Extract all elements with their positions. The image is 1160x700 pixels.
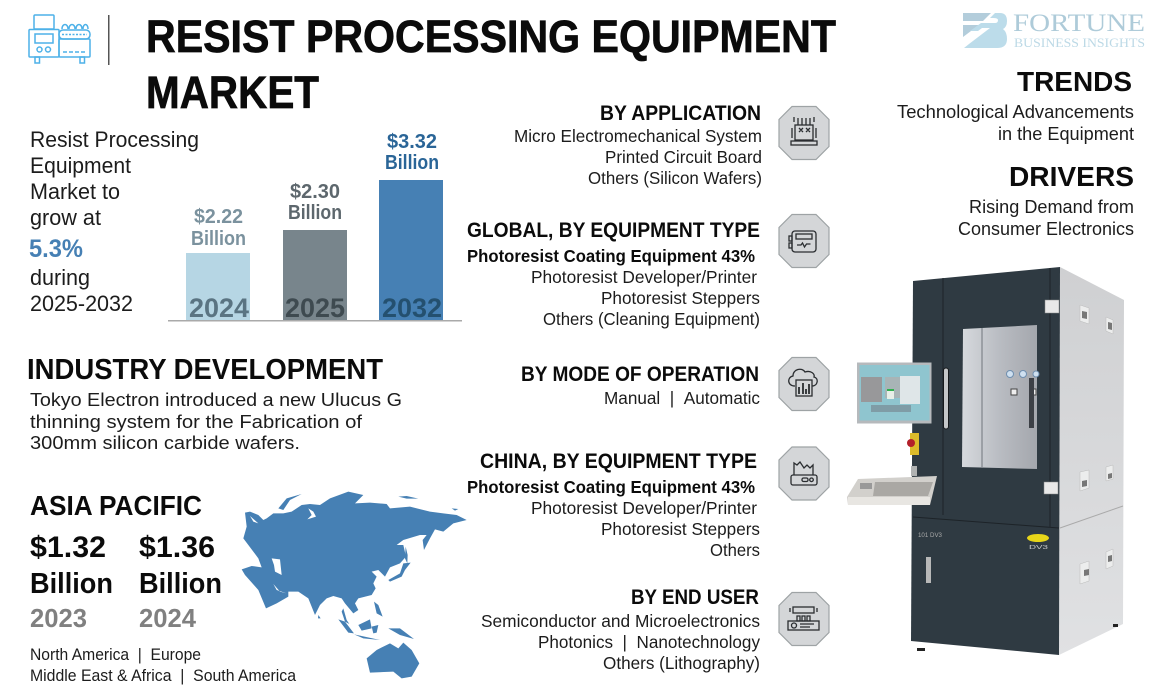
industry development: INDUSTRY DEVELOPMENT (27, 354, 383, 386)
by application: Micro Electromechanical System (514, 126, 762, 146)
industry development: Tokyo Electron introduced a new Ulucus G (30, 389, 402, 410)
icon: end user (779, 592, 829, 646)
other regions: Middle East & Africa | South America (30, 667, 297, 685)
growth text: 2025-2032 (30, 291, 133, 316)
china by equipment type: CHINA, BY EQUIPMENT TYPE (480, 450, 757, 473)
by application: BY APPLICATION (600, 102, 761, 125)
divider (108, 15, 110, 65)
keyboard (847, 476, 937, 505)
drivers (958, 161, 1134, 239)
global by equipment type: GLOBAL, BY EQUIPMENT TYPE (467, 219, 760, 242)
drivers: DRIVERS (1009, 161, 1134, 192)
logo: Fortune Business Insights: FORTUNE (1013, 10, 1145, 37)
asia pacific stats: 2023 (30, 603, 87, 633)
title: RESIST PROCESSING EQUIPMENT (146, 11, 836, 62)
bar chart: Billion (385, 152, 439, 174)
drivers: Rising Demand from (969, 197, 1134, 217)
trends (897, 66, 1134, 144)
asia pacific stats (30, 490, 222, 633)
emergency stop (910, 433, 919, 455)
panel label and logo: 101 DV3 (918, 533, 943, 539)
by mode of operation: Manual | Automatic (604, 388, 760, 408)
icon: equipment type (779, 214, 829, 268)
asia pacific stats: Billion (139, 568, 222, 600)
by end user: Semiconductor and Microelectronics (481, 611, 760, 631)
equipment illustration (847, 267, 1124, 655)
icon: application (779, 106, 829, 160)
icon: mode of operation (779, 358, 829, 410)
growth text: during (30, 265, 90, 290)
by end user: BY END USER (631, 586, 759, 609)
bar chart: $3.32 (387, 131, 437, 153)
trends: in the Equipment (998, 124, 1134, 144)
by end user: Photonics | Nanotechnology (538, 632, 760, 652)
by end user: Others (Lithography) (603, 653, 760, 673)
logo: Fortune Business Insights: BUSINESS INSIGHTS (1014, 35, 1145, 50)
front panel (911, 267, 1060, 655)
asia pacific stats: $1.32 (30, 531, 106, 564)
trends: Technological Advancements (897, 102, 1134, 122)
industry development (27, 354, 402, 453)
hinges (1045, 300, 1059, 313)
growth text: Market to (30, 179, 120, 204)
asia pacific stats: ASIA PACIFIC (30, 490, 202, 521)
asia pacific stats: 2024 (139, 603, 197, 633)
growth text (29, 127, 199, 316)
global by equipment type: Photoresist Steppers (601, 288, 760, 308)
asia pacific stats: Billion (30, 568, 113, 600)
bar chart: $2.22 (194, 206, 243, 228)
asia pacific stats: $1.36 (139, 531, 215, 564)
bar chart: 2024 (189, 293, 249, 323)
drivers: Consumer Electronics (958, 219, 1134, 239)
global by equipment type: Photoresist Coating Equipment 43% (467, 246, 755, 266)
door handle (944, 368, 948, 429)
growth text: grow at (30, 205, 101, 230)
monitor (857, 362, 932, 424)
china by equipment type (467, 450, 760, 560)
industry development: 300mm silicon carbide wafers. (30, 432, 300, 453)
other regions: North America | Europe (30, 646, 201, 664)
title (146, 11, 836, 118)
bar chart: Billion (288, 202, 342, 224)
map: Asia Pacific (242, 492, 467, 678)
by application (514, 102, 762, 188)
growth text: 5.3% (29, 235, 83, 263)
bar chart: $2.30 (290, 181, 340, 203)
global by equipment type: Photoresist Developer/Printer (531, 267, 757, 287)
bar chart: 2032 (382, 293, 442, 323)
global by equipment type (467, 219, 760, 329)
window (962, 325, 1037, 469)
side panel (1059, 267, 1124, 655)
china by equipment type: Photoresist Steppers (601, 519, 760, 539)
china by equipment type: Photoresist Developer/Printer (531, 498, 757, 518)
side vents (1080, 305, 1113, 584)
growth text: Equipment (30, 153, 131, 178)
by application: Others (Silicon Wafers) (588, 168, 762, 188)
by application: Printed Circuit Board (605, 147, 762, 167)
bar chart: Billion (191, 228, 246, 250)
icon: china equipment (779, 447, 829, 500)
china by equipment type: Others (710, 540, 760, 560)
industry development: thinning system for the Fabrication of (30, 411, 363, 432)
bar chart (168, 131, 462, 323)
icon: processing equipment (29, 15, 90, 63)
equipment illustration: DV3 (1029, 545, 1048, 551)
bar chart: 2025 (285, 293, 345, 323)
china by equipment type: Photoresist Coating Equipment 43% (467, 477, 755, 497)
by mode of operation (521, 363, 760, 408)
trends: TRENDS (1017, 66, 1132, 97)
feet (917, 648, 925, 651)
by end user (481, 586, 760, 673)
logo: Fortune Business Insights (963, 10, 1145, 50)
other regions (30, 646, 297, 685)
growth text: Resist Processing (30, 127, 199, 152)
by mode of operation: BY MODE OF OPERATION (521, 363, 759, 386)
title: MARKET (146, 67, 319, 118)
global by equipment type: Others (Cleaning Equipment) (543, 309, 760, 329)
